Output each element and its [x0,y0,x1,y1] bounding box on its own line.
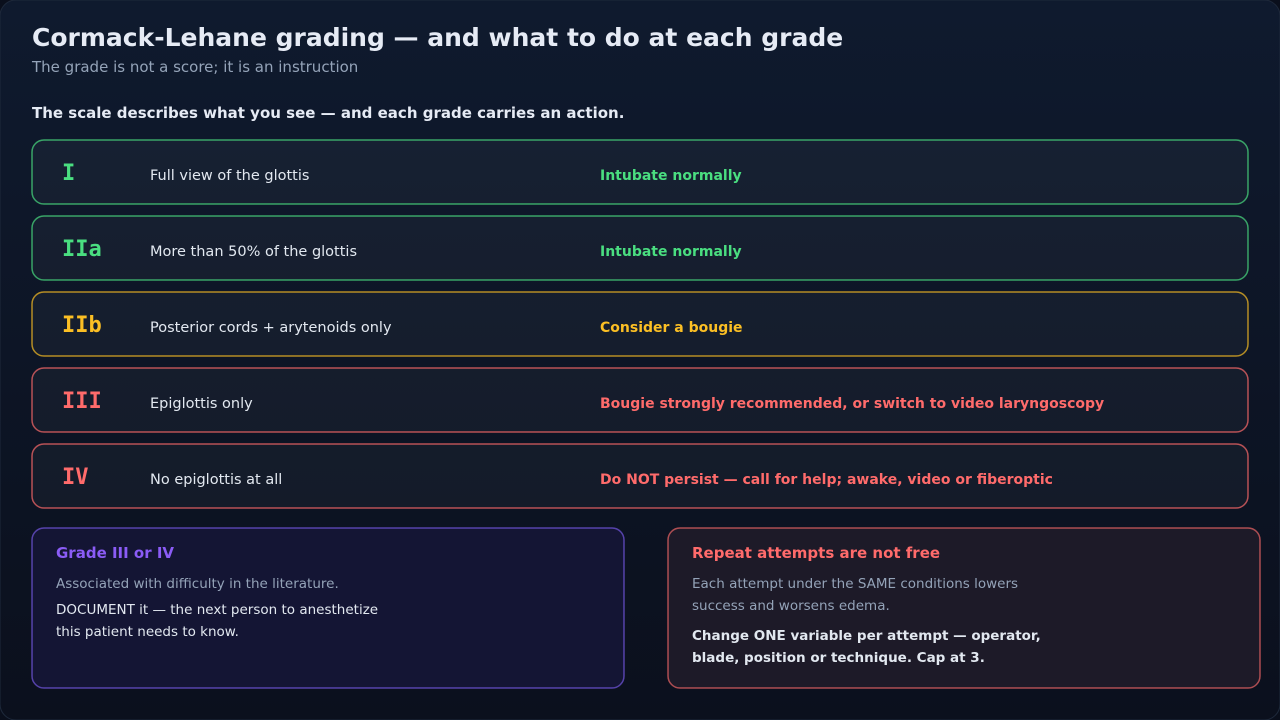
callout: Grade III or IV [32,528,624,688]
action: Bougie strongly recommended, or switch to video laryngoscopy [600,396,1104,412]
title: Cormack-Lehane grading — and what to do at each grade [32,23,843,52]
callout heading: Repeat attempts are not free [692,544,940,562]
view description: More than 50% of the glottis [150,244,357,260]
row box [32,216,1248,280]
callout instruction [692,628,1041,666]
view description: Posterior cords + arytenoids only [150,320,392,336]
view description: Full view of the glottis [150,168,309,184]
subtitle: The grade is not a score; it is an instruction [31,58,358,76]
row box [32,444,1248,508]
action: Do NOT persist — call for help; awake, video or fiberoptic [600,472,1053,488]
view description: No epiglottis at all [150,472,282,488]
action: Intubate normally [600,244,742,260]
callout instruction: blade, position or technique. Cap at 3. [692,650,985,666]
row: grade IIb [32,292,1248,356]
callout note: Associated with difficulty in the literature. [56,576,339,592]
action: Intubate normally [600,168,742,184]
row box [32,292,1248,356]
callout note [692,576,1018,614]
row: grade IIa [32,216,1248,280]
callout instruction: this patient needs to know. [56,624,239,640]
grade label I: I [62,161,75,186]
section heading: The scale describes what you see — and each grade carries an action. [32,104,624,122]
callout note: success and worsens edema. [692,598,890,614]
view description: Epiglottis only [150,396,253,412]
callout instruction [56,602,378,640]
callout box [32,528,624,688]
callout: Repeat attempts [668,528,1260,688]
callout note: Each attempt under the SAME conditions lowers [692,576,1018,592]
grade label IIa: IIa [62,237,102,262]
grade label III: III [62,389,102,414]
row: grade I [32,140,1248,204]
row box [32,140,1248,204]
callout box [668,528,1260,688]
grade label IV: IV [62,465,88,490]
callout instruction: DOCUMENT it — the next person to anesthetize [56,602,378,618]
row box [32,368,1248,432]
row: grade IV [32,444,1248,508]
callout instruction: Change ONE variable per attempt — operator, [692,628,1041,644]
action: Consider a bougie [600,320,743,336]
callout heading: Grade III or IV [56,544,174,562]
grade label IIb: IIb [62,313,102,338]
row: grade III [32,368,1248,432]
